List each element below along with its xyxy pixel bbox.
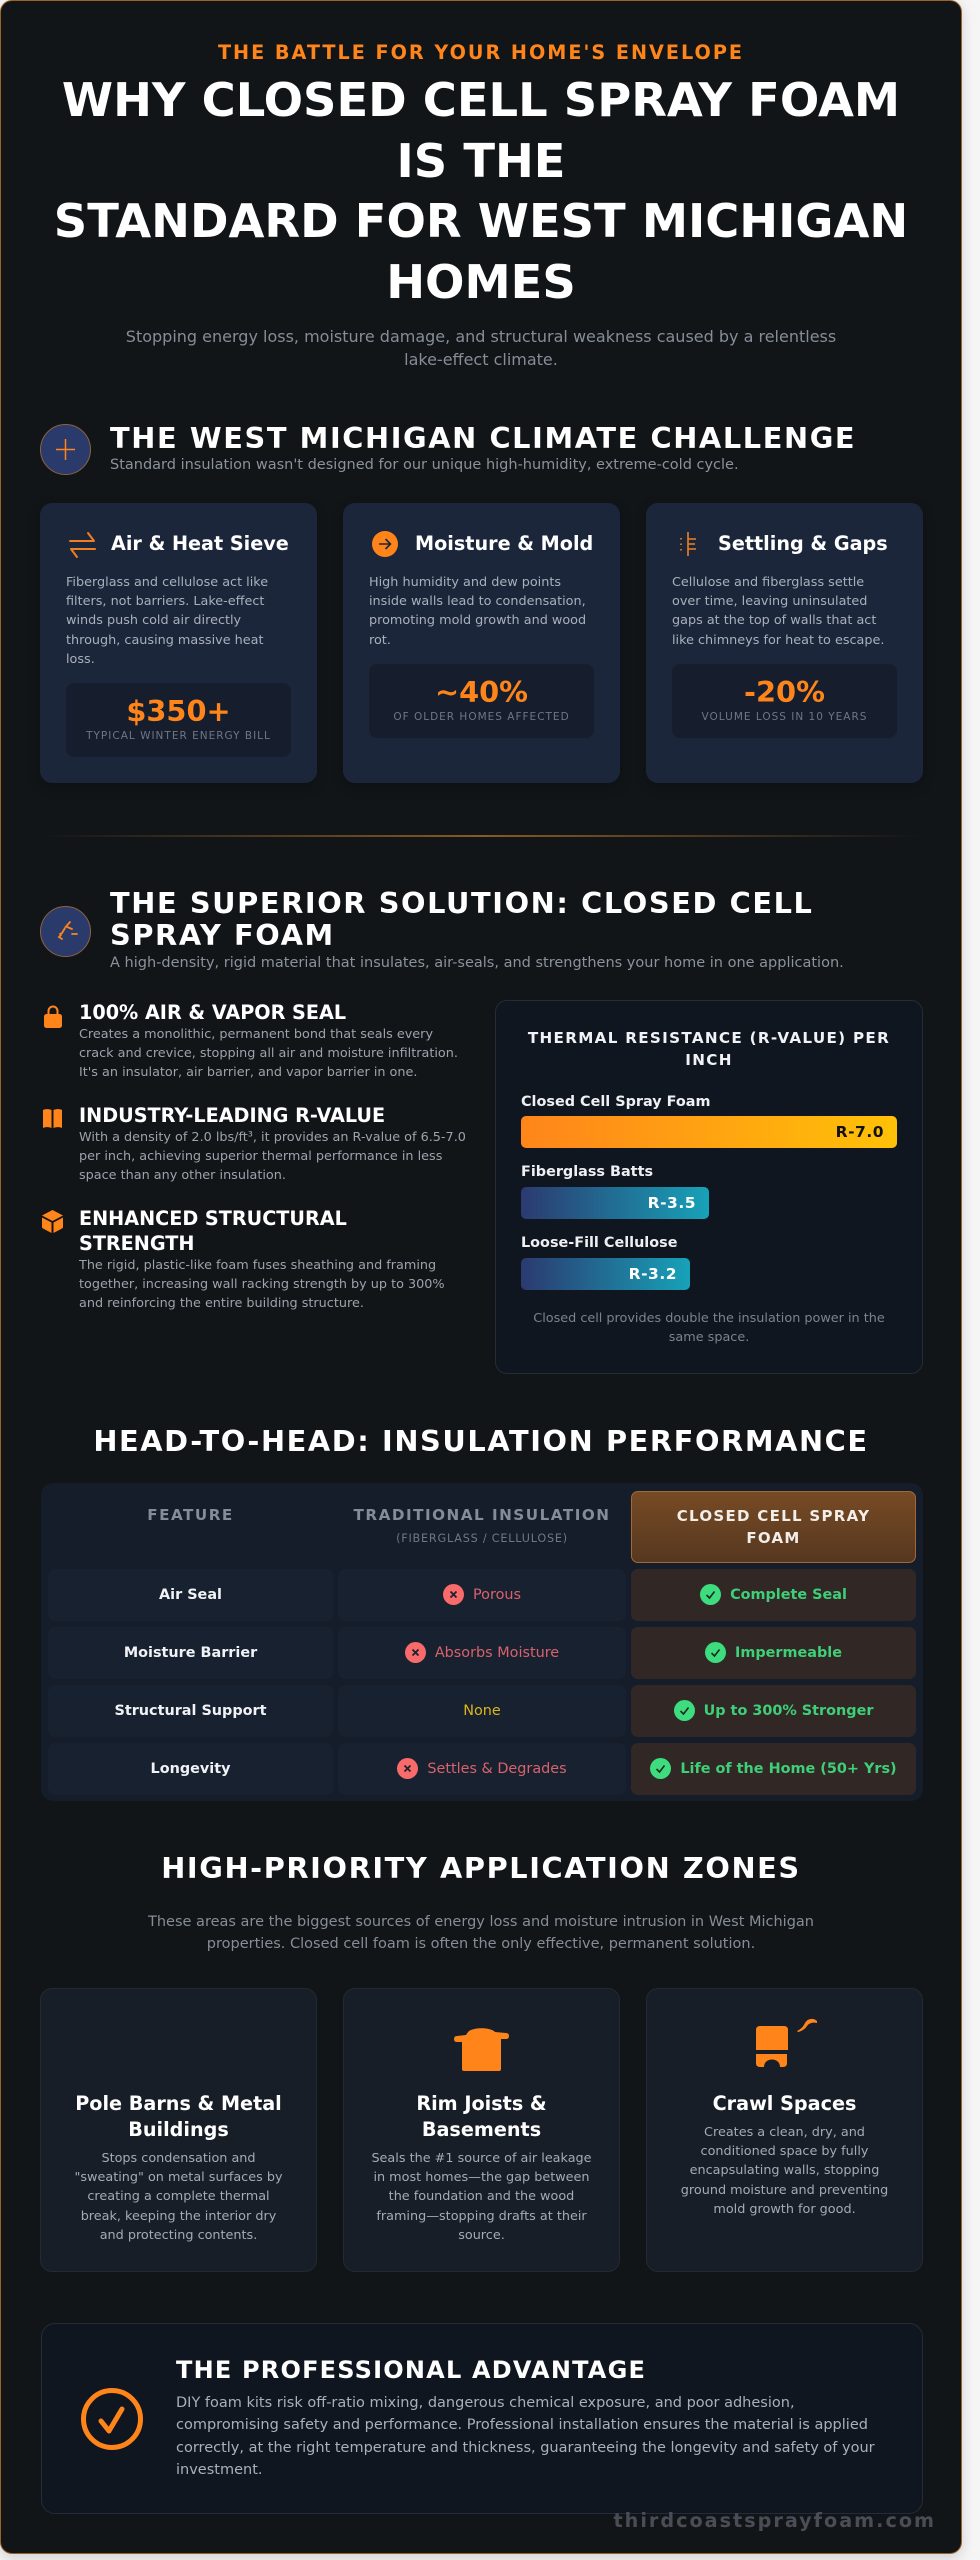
title: IS THE bbox=[396, 134, 565, 188]
stat: volume loss bbox=[672, 664, 897, 738]
zone body bbox=[681, 2125, 888, 2217]
icon: book bbox=[43, 1109, 62, 1128]
zone title: Pole Barns & Metal bbox=[75, 2092, 282, 2115]
row: moisture barrier bbox=[48, 1627, 333, 1679]
closed cell: impermeable: Impermeable bbox=[735, 1645, 842, 1661]
traditional: none bbox=[338, 1685, 626, 1737]
feature title: INDUSTRY-LEADING R-VALUE bbox=[79, 1104, 385, 1126]
zone title: Crawl Spaces bbox=[713, 2092, 856, 2115]
column header: traditional: TRADITIONAL INSULATION bbox=[354, 1506, 610, 1524]
icon: check circle bbox=[81, 2388, 143, 2450]
title: STANDARD FOR WEST MICHIGAN bbox=[54, 194, 908, 248]
panel: pole barns bbox=[40, 1988, 317, 2272]
closed cell: life of the home bbox=[631, 1743, 916, 1795]
traditional: settles: Settles & Degrades bbox=[427, 1761, 567, 1777]
bar: closed cell bbox=[521, 1116, 897, 1148]
card title: Air & Heat Sieve bbox=[111, 532, 289, 555]
row: air seal bbox=[48, 1569, 333, 1621]
card body bbox=[369, 575, 586, 648]
stat: winter bill: TYPICAL WINTER ENERGY BILL bbox=[86, 730, 271, 742]
chart note: Closed cell provides double the insulation power in the bbox=[533, 1311, 885, 1326]
feature body: per inch, achieving superior thermal performance in less bbox=[79, 1149, 442, 1164]
panel: moisture and mold bbox=[343, 503, 620, 783]
chart note: same space. bbox=[669, 1330, 749, 1345]
zone body: conditioned space by fully bbox=[701, 2144, 868, 2159]
climate subheading: Standard insulation wasn't designed for our unique high-humidity, extreme-cold cycle. bbox=[110, 457, 739, 473]
feature body bbox=[79, 1130, 466, 1183]
row: longevity: Longevity bbox=[151, 1761, 230, 1777]
closed cell: complete seal bbox=[631, 1569, 916, 1621]
row: structural support bbox=[48, 1685, 333, 1737]
eyebrow: THE BATTLE FOR YOUR HOME'S ENVELOPE bbox=[218, 41, 744, 64]
zone body: the foundation and the wood bbox=[389, 2189, 574, 2204]
zone body: source. bbox=[458, 2228, 505, 2243]
zone title: Rim Joists & bbox=[416, 2092, 547, 2115]
zone title: Buildings bbox=[128, 2118, 229, 2141]
panel: comparison table bbox=[41, 1483, 923, 1801]
closed cell: impermeable bbox=[631, 1627, 916, 1679]
feature body: It's an insulator, air barrier, and vapor barrier in one. bbox=[79, 1065, 417, 1080]
card title: Moisture & Mold bbox=[415, 532, 593, 555]
advantage body: investment. bbox=[176, 2462, 262, 2478]
zone body: Creates a clean, dry, and bbox=[704, 2125, 865, 2140]
zone body: mold growth for good. bbox=[713, 2202, 856, 2217]
zones intro bbox=[148, 1914, 814, 1952]
bar: cellulose bbox=[521, 1258, 690, 1290]
zone body: Seals the #1 source of air leakage bbox=[371, 2151, 592, 2166]
stat: winter bill: $350+ bbox=[126, 694, 231, 728]
title bbox=[54, 73, 908, 308]
feature title: ENHANCED STRUCTURAL bbox=[79, 1206, 347, 1230]
column header: feature: FEATURE bbox=[147, 1506, 234, 1524]
icon: arrow circle bbox=[372, 531, 398, 557]
bar: fiberglass: R-3.5 bbox=[648, 1194, 696, 1212]
solution subheading: A high-density, rigid material that insulates, air-seals, and strengthens your home in one application. bbox=[110, 955, 844, 971]
card body: loss. bbox=[66, 652, 95, 667]
zone body bbox=[371, 2151, 592, 2243]
title: WHY CLOSED CELL SPRAY FOAM bbox=[62, 73, 900, 127]
column header: closed cell bbox=[631, 1491, 916, 1563]
closed cell: complete seal: Complete Seal bbox=[730, 1587, 847, 1603]
card body: through, causing massive heat bbox=[66, 633, 263, 648]
traditional: absorbs moisture bbox=[338, 1627, 626, 1679]
stat: volume loss: VOLUME LOSS IN 10 YEARS bbox=[702, 711, 867, 723]
zone title bbox=[416, 2092, 547, 2141]
panel: air and heat sieve bbox=[40, 503, 317, 783]
icon: rim joist bbox=[454, 2028, 509, 2071]
row: structural support: Structural Support bbox=[114, 1703, 267, 1719]
panel: r-value chart bbox=[495, 1000, 923, 1374]
zone title bbox=[75, 2092, 282, 2141]
feature body: space than any other insulation. bbox=[79, 1168, 286, 1183]
zone body: in most homes—the gap between bbox=[373, 2170, 590, 2185]
zone body: "sweating" on metal surfaces by bbox=[74, 2170, 283, 2185]
closed cell: stronger: Up to 300% Stronger bbox=[704, 1703, 873, 1719]
subtitle: Stopping energy loss, moisture damage, and structural weakness caused by a relentless bbox=[126, 327, 836, 346]
chart title: INCH bbox=[685, 1051, 733, 1069]
heading: application zones: HIGH-PRIORITY APPLICATION ZONES bbox=[161, 1851, 801, 1885]
zone body: framing—stopping drafts at their bbox=[376, 2209, 587, 2224]
heading: superior solution: THE SUPERIOR SOLUTION: CLOSED CELL bbox=[110, 886, 814, 920]
title: HOMES bbox=[386, 254, 576, 308]
zone body bbox=[74, 2151, 283, 2243]
icon: lock bbox=[44, 1006, 62, 1028]
advantage body bbox=[176, 2395, 875, 2478]
feature body bbox=[79, 1027, 458, 1080]
feature body: crack and crevice, stopping all air and moisture infiltration. bbox=[79, 1046, 458, 1061]
panel: settling and gaps bbox=[646, 503, 923, 783]
stat: volume loss: -20% bbox=[744, 675, 825, 709]
row: air seal: Air Seal bbox=[159, 1587, 222, 1603]
bar label: Fiberglass Batts bbox=[521, 1164, 653, 1180]
card body: High humidity and dew points bbox=[369, 575, 561, 590]
traditional: none: None bbox=[463, 1703, 501, 1719]
zones intro: These areas are the biggest sources of energy loss and moisture intrusion in West Michigan bbox=[148, 1914, 814, 1930]
icon: crawl space bbox=[756, 2018, 817, 2067]
column header: closed cell: FOAM bbox=[746, 1529, 801, 1547]
card body: winds push cold air directly bbox=[66, 613, 241, 628]
traditional: porous bbox=[338, 1569, 626, 1621]
card body: filters, not barriers. Lake-effect bbox=[66, 594, 264, 609]
closed cell: life of the home: Life of the Home (50+ Yrs) bbox=[680, 1761, 897, 1777]
panel: professional advantage bbox=[41, 2323, 923, 2514]
panel: rim joists bbox=[343, 1988, 620, 2272]
subtitle: lake-effect climate. bbox=[404, 350, 558, 368]
card body: over time, leaving uninsulated bbox=[672, 594, 867, 609]
heading: climate challenge: THE WEST MICHIGAN CLIMATE CHALLENGE bbox=[110, 421, 856, 455]
feature title: STRENGTH bbox=[79, 1232, 194, 1254]
advantage title: THE PROFESSIONAL ADVANTAGE bbox=[176, 2356, 646, 2384]
card body: gaps at the top of walls that act bbox=[672, 613, 876, 628]
card body: like chimneys for heat to escape. bbox=[672, 633, 884, 648]
zone body: and protecting contents. bbox=[100, 2228, 257, 2243]
bar label: Loose-Fill Cellulose bbox=[521, 1235, 677, 1251]
feature body: and reinforcing the entire building structure. bbox=[79, 1296, 364, 1311]
chart title: THERMAL RESISTANCE (R-VALUE) PER bbox=[528, 1029, 890, 1047]
traditional: porous: Porous bbox=[473, 1587, 521, 1603]
heading: head-to-head: HEAD-TO-HEAD: INSULATION PERFORMANCE bbox=[93, 1424, 869, 1458]
stat: older homes bbox=[369, 664, 594, 738]
zone body: encapsulating walls, stopping bbox=[690, 2163, 879, 2178]
feature body: Creates a monolithic, permanent bond that seals every bbox=[79, 1027, 433, 1042]
card body bbox=[672, 575, 884, 648]
feature title: 100% AIR & VAPOR SEAL bbox=[79, 1000, 346, 1024]
stat: older homes: OF OLDER HOMES AFFECTED bbox=[393, 711, 570, 723]
zone body: break, keeping the interior dry bbox=[81, 2209, 276, 2224]
subtitle bbox=[126, 327, 836, 368]
feature title bbox=[79, 1206, 347, 1254]
zone body: Stops condensation and bbox=[101, 2151, 256, 2166]
card body bbox=[66, 575, 268, 667]
feature body: The rigid, plastic-like foam fuses sheathing and framing bbox=[79, 1258, 436, 1273]
stat: older homes: ~40% bbox=[435, 675, 528, 709]
traditional: absorbs moisture: Absorbs Moisture bbox=[435, 1645, 559, 1661]
card body: Cellulose and fiberglass settle bbox=[672, 575, 864, 590]
chart note bbox=[533, 1311, 885, 1345]
advantage body: DIY foam kits risk off-ratio mixing, dangerous chemical exposure, and poor adhesion, bbox=[176, 2395, 795, 2411]
heading: superior solution bbox=[110, 886, 814, 952]
bar: closed cell: R-7.0 bbox=[836, 1123, 884, 1141]
traditional: settles bbox=[338, 1743, 626, 1795]
bar: cellulose: R-3.2 bbox=[629, 1265, 677, 1283]
bar: fiberglass bbox=[521, 1187, 709, 1219]
column header: closed cell: CLOSED CELL SPRAY bbox=[677, 1507, 870, 1525]
bar label: Closed Cell Spray Foam bbox=[521, 1094, 710, 1110]
card title: Settling & Gaps bbox=[718, 532, 888, 555]
feature body bbox=[78, 1258, 445, 1311]
panel: crawl spaces bbox=[646, 1988, 923, 2272]
zones intro: properties. Closed cell foam is often the only effective, permanent solution. bbox=[207, 1936, 755, 1952]
column subheader: (FIBERGLASS / CELLULOSE) bbox=[396, 1532, 568, 1545]
card body: rot. bbox=[369, 633, 391, 648]
card body: promoting mold growth and wood bbox=[369, 613, 586, 628]
zone title: Basements bbox=[422, 2118, 541, 2141]
card body: Fiberglass and cellulose act like bbox=[66, 575, 268, 590]
advantage body: compromising safety and performance. Professional installation ensures the material is applied bbox=[176, 2417, 868, 2433]
closed cell: stronger bbox=[631, 1685, 916, 1737]
advantage body: correctly, at the right temperature and thickness, guaranteeing the longevity and safety of your bbox=[176, 2440, 875, 2456]
chart title bbox=[528, 1029, 890, 1069]
row: longevity bbox=[48, 1743, 333, 1795]
stat: winter bill bbox=[66, 683, 291, 757]
icon: settling bbox=[680, 532, 696, 556]
icon: arrows bbox=[69, 532, 96, 558]
zone body: ground moisture and preventing bbox=[681, 2183, 888, 2198]
icon: climate section bbox=[40, 424, 91, 475]
row: moisture barrier: Moisture Barrier bbox=[124, 1645, 257, 1661]
icon: cube bbox=[42, 1210, 63, 1233]
card body: inside walls lead to condensation, bbox=[369, 594, 586, 609]
feature body: together, increasing wall racking strength by up to 300% bbox=[79, 1277, 445, 1292]
zone body: creating a complete thermal bbox=[87, 2189, 270, 2204]
heading: superior solution: SPRAY FOAM bbox=[110, 918, 335, 952]
icon: solution section bbox=[40, 906, 91, 957]
feature body: With a density of 2.0 lbs/ft³, it provides an R-value of 6.5-7.0 bbox=[79, 1130, 466, 1145]
watermark: thirdcoastsprayfoam.com bbox=[614, 2509, 936, 2532]
